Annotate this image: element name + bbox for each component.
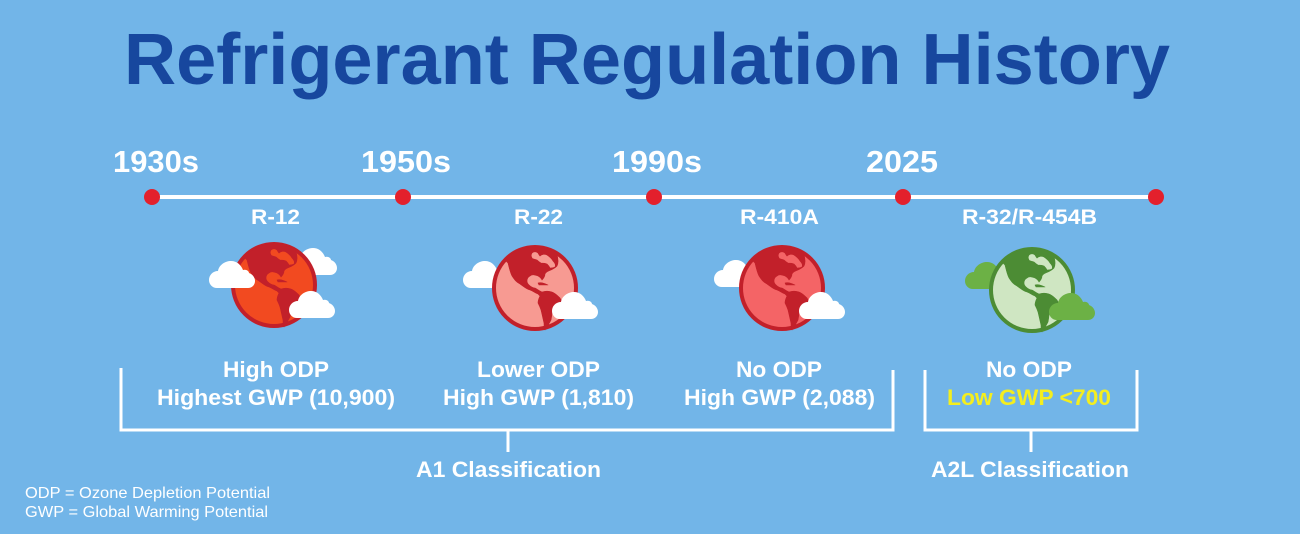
refrigerant names: R-12 — [251, 206, 300, 229]
refrigerant names: R-22 — [514, 206, 563, 229]
properties: R-22: Lower ODP — [477, 357, 600, 382]
timeline — [144, 189, 1164, 205]
label: A2L classification: A2L Classification — [931, 457, 1129, 482]
properties: R-12: Highest GWP (10,900) — [157, 385, 395, 410]
label: A1 classification: A1 Classification — [416, 457, 601, 482]
legend note: ODP = Ozone Depletion Potential — [25, 485, 270, 502]
properties: R-32/R-454B: Low GWP <700 — [947, 385, 1111, 410]
properties: R-22 — [443, 357, 634, 410]
properties: R-410A — [684, 357, 875, 410]
icon: globe R-12 with clouds — [209, 244, 337, 327]
properties: R-410A: No ODP — [736, 357, 822, 382]
icon: globe R-32/R-454B with clouds — [965, 249, 1095, 332]
year labels — [113, 144, 938, 179]
year labels: 1950s — [361, 144, 451, 179]
properties: R-32/R-454B: No ODP — [986, 357, 1072, 382]
properties: R-32/R-454B — [947, 357, 1111, 410]
properties: R-22: High GWP (1,810) — [443, 385, 634, 410]
refrigerant names: R-32/R-454B — [962, 206, 1097, 229]
bracket: A2L — [925, 370, 1137, 452]
bracket: A1 — [121, 368, 893, 452]
icon: globe R-22 with clouds — [463, 247, 598, 330]
properties: R-410A: High GWP (2,088) — [684, 385, 875, 410]
refrigerant names: R-410A — [740, 206, 819, 229]
properties: R-12: High ODP — [223, 357, 329, 382]
year labels: 2025 — [866, 144, 938, 179]
properties: R-12 — [157, 357, 395, 410]
year labels: 1990s — [612, 144, 702, 179]
legend note — [25, 485, 270, 521]
year labels: 1930s — [113, 144, 199, 179]
refrigerant names — [251, 206, 1097, 229]
icon: globe R-410A with clouds — [714, 247, 845, 330]
legend note: GWP = Global Warming Potential — [25, 504, 268, 521]
title: Refrigerant Regulation History — [124, 20, 1170, 100]
